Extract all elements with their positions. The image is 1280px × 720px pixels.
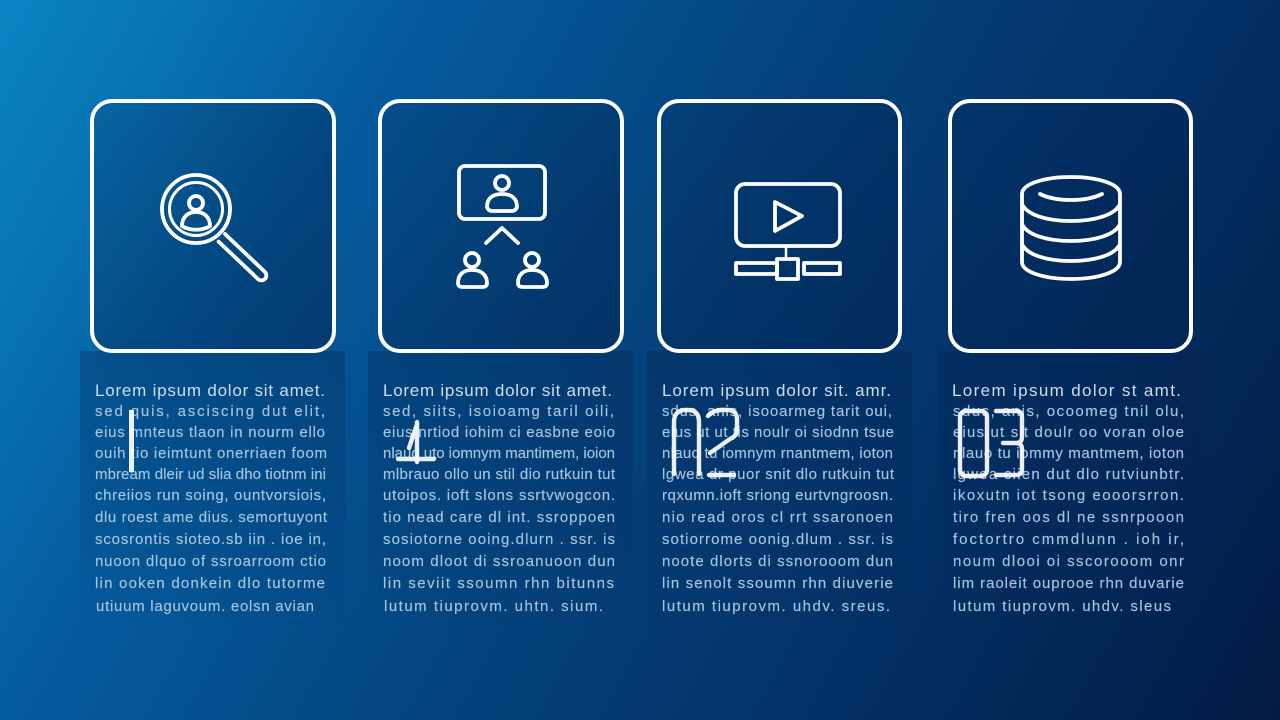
body text 2 bbox=[383, 381, 616, 615]
body text 4: noum dlooi oi sscorooom onr bbox=[953, 553, 1184, 570]
number: 03 bbox=[960, 411, 1022, 476]
body text 3: sotiorrome oonig.dlum . ssr. is bbox=[662, 531, 893, 548]
body text 1: Lorem ipsum dolor sit amet. bbox=[95, 381, 325, 400]
body text 1: dlu roest ame dius. semortuyont bbox=[95, 509, 328, 526]
body text 1: scosrontis sioteo.sb iin . ioe in, bbox=[95, 531, 326, 548]
panel: column 2 bbox=[368, 101, 633, 631]
body text 3 bbox=[662, 381, 895, 615]
text backdrop 3 bbox=[647, 351, 912, 631]
body text 1: eius mnteus tlaon in nourm ello bbox=[95, 424, 325, 441]
icon: magnifier with person bbox=[162, 175, 266, 280]
body text 3: sdus, anis, isooarmeg tarit oui, bbox=[662, 403, 892, 420]
body text 3: eius ut ut tis noulr oi siodnn tsue bbox=[662, 424, 894, 441]
body text 2: noom dloot di ssroanuoon dun bbox=[383, 553, 615, 570]
panel: column 1 bbox=[80, 101, 345, 631]
body text 1: chreiios run soing, ountvorsiois, bbox=[95, 487, 326, 504]
body text 2: Lorem ipsum dolor sit amet. bbox=[383, 381, 612, 400]
icon: video network bbox=[736, 184, 840, 279]
body text 4: Lorem ipsum dolor st amt. bbox=[952, 381, 1181, 400]
body text 4: sdus, anis, ocoomeg tnil olu, bbox=[953, 403, 1184, 420]
body text 4: lgwea ciien dut dlo rutviunbtr. bbox=[953, 466, 1184, 483]
body text 3: noote dlorts di ssnorooom dun bbox=[662, 553, 893, 570]
body text 1: mbream dleir ud slia dho tiotnm ini bbox=[95, 466, 326, 483]
body text 3: lgwea dr puor snit dlo rutkuin tut bbox=[662, 466, 895, 483]
text backdrop 2 bbox=[368, 351, 633, 631]
card 2 bbox=[380, 101, 622, 351]
body text 4: lim raoleit ouprooe rhn duvarie bbox=[953, 575, 1184, 592]
body text 3: lin senolt ssoumn rhn diuverie bbox=[662, 575, 893, 592]
body text 2: utoipos. ioft slons ssrtvwogcon. bbox=[383, 487, 615, 504]
body text 3: nlauo tu iomnym rnantmem, ioton bbox=[662, 445, 893, 462]
body text 4 bbox=[952, 381, 1184, 615]
body text 4: nlauo tu iommy mantmem, ioton bbox=[953, 445, 1184, 462]
body text 1: utiuum laguvoum. eolsn avian bbox=[96, 598, 314, 615]
body text 2: sosiotorne ooing.dlurn . ssr. is bbox=[383, 531, 615, 548]
number: 1 bbox=[129, 410, 134, 472]
text backdrop 4 bbox=[938, 351, 1203, 631]
body text 1: lin ooken donkein dlo tutorme bbox=[95, 575, 325, 592]
body text 2: tio nead care dl int. ssroppoen bbox=[383, 509, 615, 526]
body text 1 bbox=[95, 381, 328, 615]
body text 4: lutum tiuprovm. uhdv. sleus bbox=[953, 598, 1171, 615]
card 1 bbox=[92, 101, 334, 351]
body text 4: eius ut sit doulr oo voran oloe bbox=[953, 424, 1184, 441]
panel: column 3 bbox=[647, 101, 912, 631]
body text 2: sed, siits, isoioamg taril oili, bbox=[383, 403, 614, 420]
body text 3: rqxumn.ioft sriong eurtvngroosn. bbox=[662, 487, 893, 504]
body text 4: ikoxutn iot tsong eooorsrron. bbox=[953, 487, 1184, 504]
body text 4: foctortro cmmdlunn . ioh ir, bbox=[953, 531, 1184, 548]
body text 2: eius nrtiod iohim ci easbne eoio bbox=[383, 424, 615, 441]
body text 2: lutum tiuprovm. uhtn. sium. bbox=[384, 598, 603, 615]
body text 2: nlauo uto iomnym mantimem, ioion bbox=[383, 445, 615, 462]
body text 4: tiro fren oos dl ne ssnrpooon bbox=[953, 509, 1184, 526]
text backdrop 1 bbox=[80, 351, 345, 631]
body text 1: sed quis, asciscing dut elit, bbox=[95, 403, 325, 420]
body text 1: nuoon dlquo of ssroarroom ctio bbox=[95, 553, 326, 570]
body text 3: lutum tiuprovm. uhdv. sreus. bbox=[662, 598, 890, 615]
body text 2: mlbrauo ollo un stil dio rutkuin tut bbox=[383, 466, 616, 483]
panel: column 4 bbox=[938, 101, 1203, 631]
card 4 bbox=[950, 101, 1191, 351]
number: 02 bbox=[674, 410, 737, 475]
icon: database bbox=[1022, 177, 1120, 279]
body text 3: nio read oros cl rrt ssaronoen bbox=[662, 509, 893, 526]
body text 2: lin seviit ssoumn rhn bitunns bbox=[383, 575, 614, 592]
card 3 bbox=[659, 101, 900, 351]
number: 1 bbox=[398, 422, 434, 462]
body text 3: Lorem ipsum dolor sit. amr. bbox=[662, 381, 891, 400]
body text 1: ouih tio ieimtunt onerriaen foom bbox=[95, 445, 327, 462]
icon: presenter and team bbox=[458, 166, 547, 287]
